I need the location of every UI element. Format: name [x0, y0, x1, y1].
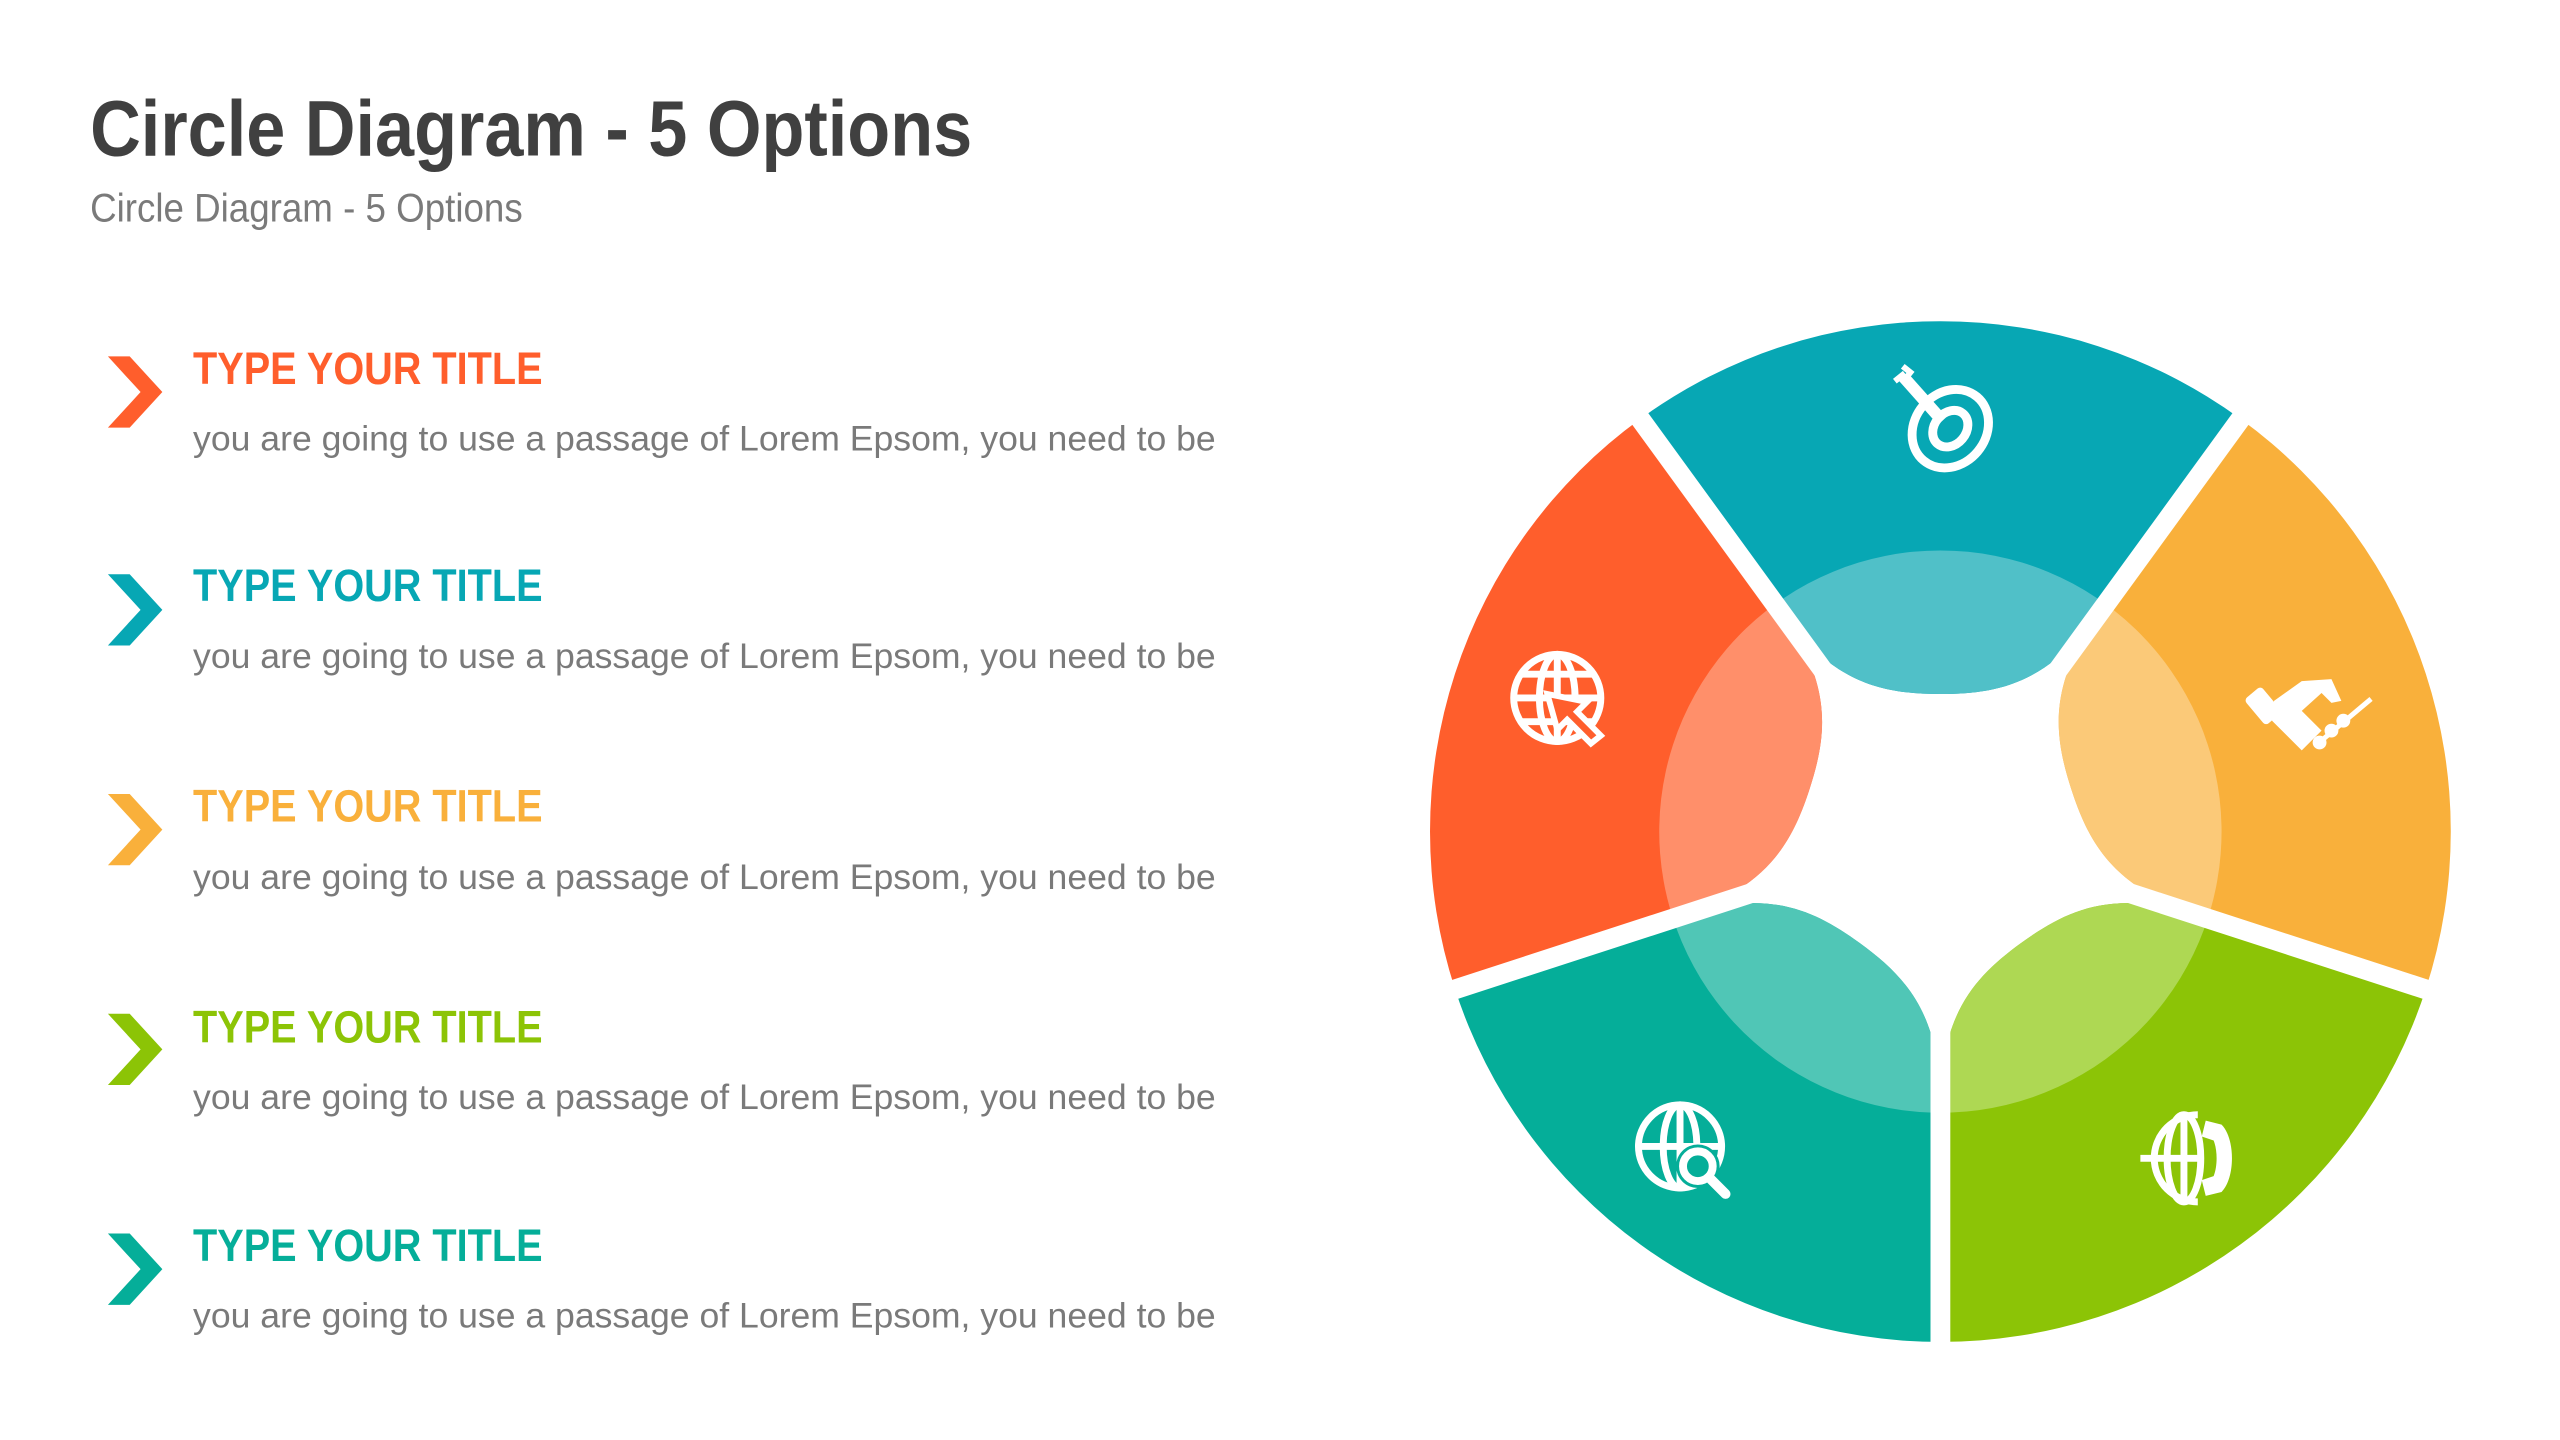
icon: globe search — [1638, 1105, 1726, 1194]
segment: bottom-left teal — [1458, 903, 1930, 1342]
item 3: TYPE YOUR TITLE — [193, 781, 543, 832]
item 2 — [108, 560, 1216, 676]
item 1: TYPE YOUR TITLE — [193, 343, 543, 394]
chevron 5 — [108, 1234, 162, 1305]
item 5: you are going to use a passage of Lorem Epsom, you need to be — [193, 1296, 1216, 1336]
chevron 3 — [108, 794, 162, 865]
item 2: TYPE YOUR TITLE — [193, 560, 543, 611]
item 4 — [108, 1001, 1216, 1117]
chevron 2 — [108, 574, 162, 645]
item 3: you are going to use a passage of Lorem Epsom, you need to be — [193, 857, 1216, 897]
item 3 — [108, 781, 1216, 897]
item 5 — [108, 1220, 1216, 1336]
icon: globe phone — [2140, 1115, 2232, 1202]
item 2: you are going to use a passage of Lorem Epsom, you need to be — [193, 636, 1216, 676]
item 1 — [108, 343, 1216, 458]
chevron 1 — [108, 356, 162, 428]
segment: bottom-right green — [1950, 903, 2422, 1342]
item 4: you are going to use a passage of Lorem Epsom, you need to be — [193, 1077, 1216, 1117]
item 1: you are going to use a passage of Lorem Epsom, you need to be — [193, 418, 1216, 458]
segment: top teal — [1640, 321, 2240, 694]
item 4: TYPE YOUR TITLE — [193, 1001, 543, 1052]
chevron 4 — [108, 1014, 162, 1085]
segment: left orange — [1430, 424, 1822, 980]
item 5: TYPE YOUR TITLE — [193, 1220, 543, 1271]
segment: right yellow — [2058, 425, 2451, 980]
icon: globe cursor — [1514, 654, 1601, 743]
subtitle: Circle Diagram - 5 Options — [90, 187, 523, 231]
icon: handshake — [2244, 679, 2371, 750]
circle diagram — [1430, 321, 2451, 1342]
icon: target — [1895, 366, 2004, 483]
title: Circle Diagram - 5 Options — [90, 83, 972, 172]
